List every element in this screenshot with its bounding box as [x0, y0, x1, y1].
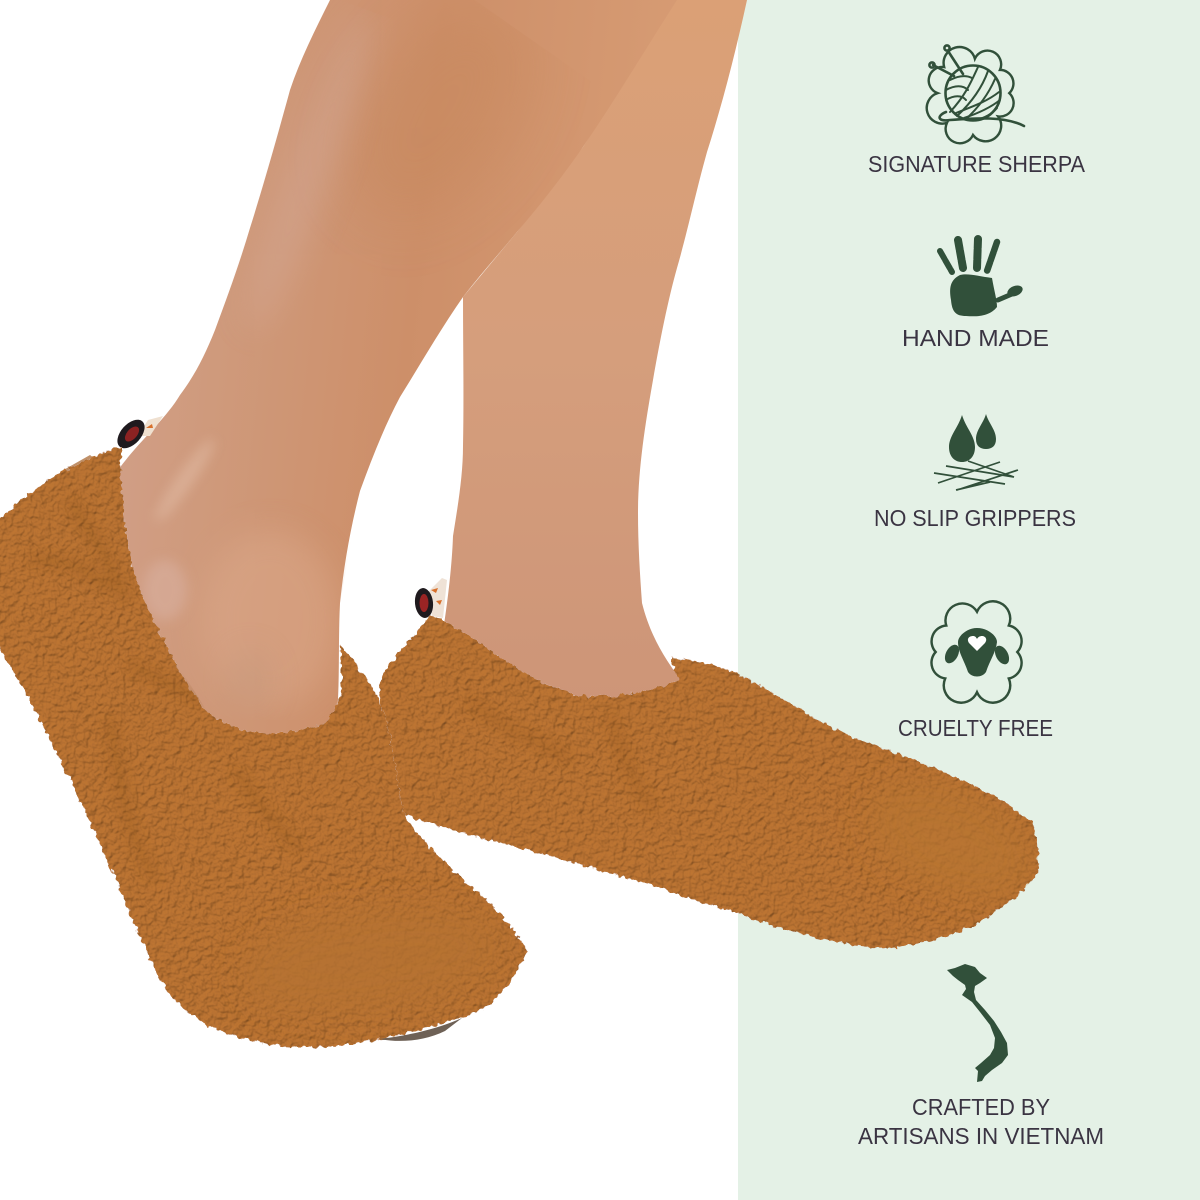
feature: no slip grippers [874, 414, 1076, 531]
feature: hand made [902, 239, 1049, 351]
label: crafted by: CRAFTED BY [912, 1094, 1050, 1120]
heel tag front [112, 415, 163, 453]
left slipper sole peek [379, 1018, 462, 1041]
icon: water drops over grip net [934, 414, 1018, 490]
icon: hand print [940, 239, 1024, 316]
label: artisans in vietnam: ARTISANS IN VIETNAM [858, 1123, 1104, 1149]
label: cruelty free: CRUELTY FREE [898, 715, 1053, 741]
feature: signature sherpa [868, 45, 1086, 177]
left slipper [0, 446, 527, 1047]
feature: crafted by artisans in vietnam [858, 964, 1104, 1149]
icon: sheep with heart in flower outline [931, 601, 1022, 703]
panel: green features background [738, 0, 1200, 1200]
heel tag back [413, 578, 447, 619]
small tag on left slipper edge [60, 455, 100, 478]
leg shading and highlights [143, 0, 566, 710]
right slipper [379, 616, 1038, 948]
right slipper shading [470, 700, 1048, 921]
left slipper folds and toe [30, 500, 506, 1028]
back leg [444, 0, 747, 705]
label: signature sherpa: SIGNATURE SHERPA [868, 151, 1086, 177]
label: hand made: HAND MADE [902, 325, 1049, 351]
photo: legs wearing sherpa slippers [0, 0, 1048, 1047]
feature: cruelty free [898, 601, 1053, 741]
icon: map of Vietnam [947, 964, 1008, 1082]
label: no slip grippers: NO SLIP GRIPPERS [874, 505, 1076, 531]
front leg [118, 0, 677, 738]
icon: yarn ball in flower outline [927, 45, 1024, 143]
